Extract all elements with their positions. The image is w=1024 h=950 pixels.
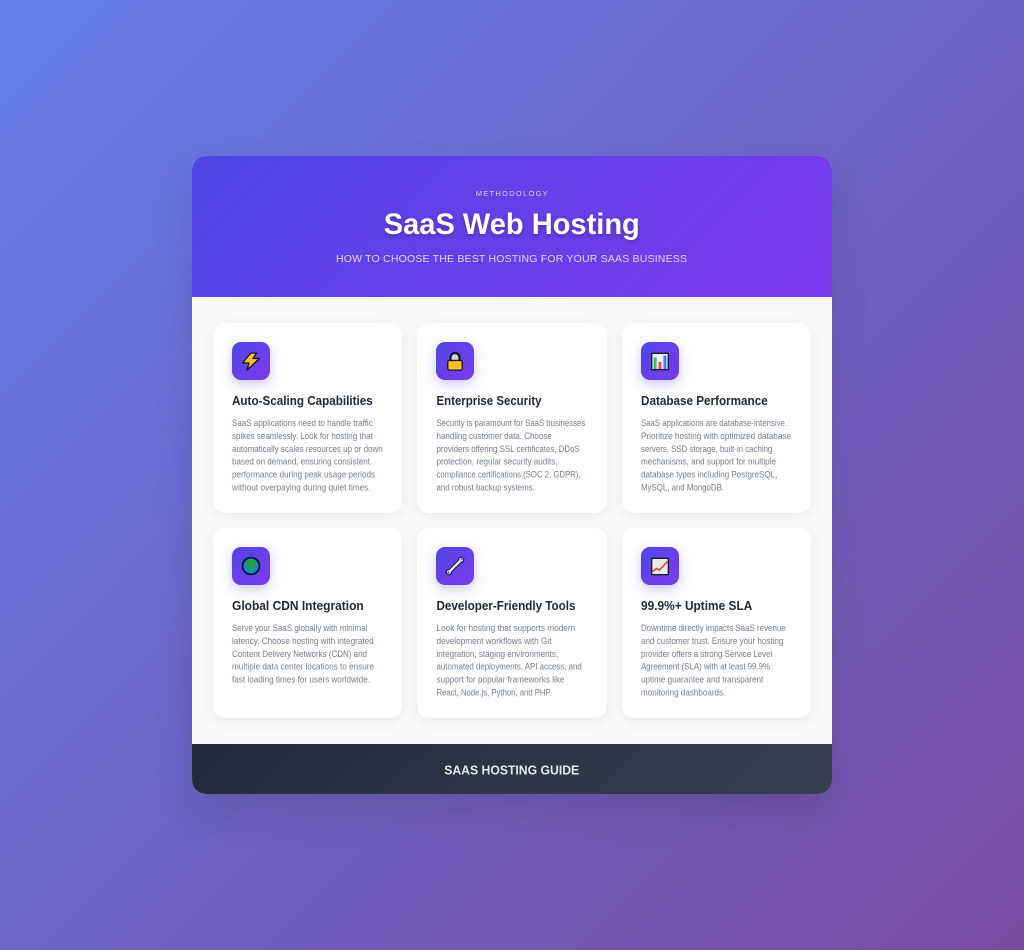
- description: [436, 623, 582, 698]
- description: React, Node.js, Python, and PHP.: [436, 688, 552, 698]
- description: integration, staging environments,: [436, 649, 558, 660]
- eyebrow label: METHODOLOGY: [476, 189, 548, 198]
- icon: lightning bolt: [232, 342, 270, 380]
- description: Security is paramount for SaaS businesses: [436, 418, 585, 429]
- description: mechanisms, and support for multiple: [641, 457, 776, 468]
- description: [231, 418, 383, 494]
- description: MySQL, and MongoDB.: [641, 482, 724, 494]
- description: spikes seamlessly. Look for hosting that: [232, 431, 373, 442]
- footer text: SAAS HOSTING GUIDE: [444, 764, 579, 778]
- description: Agreement (SLA) with at least 99.9%: [641, 662, 770, 673]
- icon: padlock: [436, 342, 474, 380]
- description: [641, 623, 786, 698]
- panel: Database Performance: [622, 323, 811, 513]
- subtitle: HOW TO CHOOSE THE BEST HOSTING FOR YOUR SAAS BUSINESS: [336, 253, 687, 265]
- description: and robust backup systems.: [436, 482, 535, 494]
- panel: Global CDN Integration: [213, 528, 402, 718]
- description: Content Delivery Networks (CDN) and: [232, 649, 367, 660]
- footer bar: [192, 744, 832, 794]
- description: protection, regular security audits,: [436, 457, 558, 468]
- description: automated deployments, API access, and: [436, 662, 582, 673]
- description: [436, 418, 585, 494]
- heading: 99.9%+ Uptime SLA: [641, 598, 753, 613]
- description: latency. Choose hosting with integrated: [232, 636, 374, 647]
- heading: Global CDN Integration: [232, 598, 364, 613]
- description: Downtime directly impacts SaaS revenue: [641, 623, 786, 634]
- panel: main card: [192, 156, 832, 794]
- description: [641, 418, 791, 494]
- description: providers offering SSL certificates, DDoS: [436, 444, 580, 455]
- icon: globe: [232, 547, 270, 585]
- description: handling customer data. Choose: [436, 431, 552, 442]
- description: [232, 623, 374, 686]
- heading: Developer-Friendly Tools: [436, 598, 576, 613]
- description: Serve your SaaS globally with minimal: [232, 623, 367, 634]
- description: servers, SSD storage, built-in caching: [641, 444, 772, 455]
- description: based on demand, ensuring consistent: [232, 457, 370, 468]
- description: performance during peak usage periods: [232, 470, 375, 481]
- heading: Database Performance: [641, 393, 768, 408]
- description: and customer trust. Ensure your hosting: [641, 636, 783, 647]
- description: uptime guarantee and transparent: [641, 675, 764, 686]
- header banner: [192, 156, 832, 297]
- description: fast loading times for users worldwide.: [232, 675, 370, 686]
- description: provider offers a strong Service Level: [641, 649, 772, 660]
- description: database types including PostgreSQL,: [641, 470, 777, 481]
- heading: Enterprise Security: [436, 393, 542, 408]
- description: SaaS applications are database-intensive.: [641, 418, 787, 429]
- icon: wrench: [436, 547, 474, 585]
- description: Look for hosting that supports modern: [436, 623, 575, 634]
- heading: Auto-Scaling Capabilities: [232, 393, 373, 408]
- icon: bar chart: [641, 342, 679, 380]
- description: without overpaying during quiet times.: [231, 482, 371, 494]
- title: SaaS Web Hosting: [384, 208, 640, 241]
- description: SaaS applications need to handle traffic: [232, 418, 373, 429]
- panel: 99.9%+ Uptime SLA: [622, 528, 811, 718]
- description: Prioritize hosting with optimized database: [641, 431, 791, 442]
- panel: Developer-Friendly Tools: [417, 528, 607, 718]
- icon: line chart: [641, 547, 679, 585]
- description: automatically scales resources up or down: [232, 444, 383, 455]
- description: monitoring dashboards.: [641, 688, 725, 698]
- description: support for popular frameworks like: [436, 675, 564, 686]
- panel: Auto-Scaling Capabilities: [213, 323, 402, 513]
- panel: Enterprise Security: [417, 323, 607, 513]
- description: multiple data center locations to ensure: [232, 662, 374, 673]
- description: development workflows with Git: [436, 636, 552, 647]
- description: compliance certifications (SOC 2, GDPR),: [436, 470, 580, 481]
